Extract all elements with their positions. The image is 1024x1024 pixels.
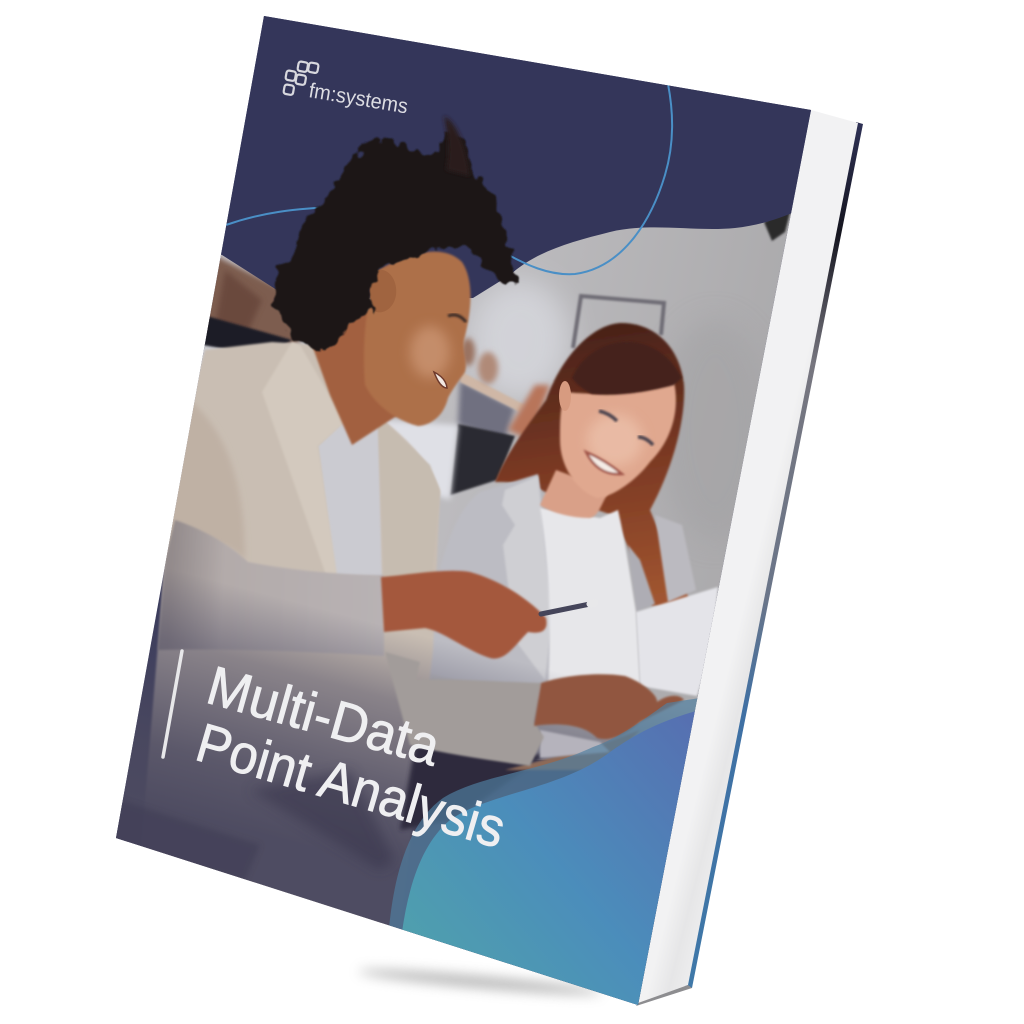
woman with dark hair <box>140 116 595 930</box>
ear <box>369 270 396 312</box>
woman in grey blazer <box>461 321 696 684</box>
title accent bar <box>163 651 182 757</box>
ground shadow <box>358 965 602 999</box>
lower sleeve and second hand <box>385 652 684 830</box>
hair fringe <box>572 342 682 395</box>
dark object top right <box>763 214 791 242</box>
white cuff <box>540 730 610 758</box>
picture frame on wall <box>573 296 664 348</box>
shirt <box>318 424 382 576</box>
face <box>560 382 676 498</box>
lapels <box>262 342 345 575</box>
sleeve <box>385 652 544 766</box>
icon: logo squares <box>283 61 319 95</box>
bottom dark fade <box>116 582 683 1005</box>
neck <box>540 470 610 518</box>
logo: fm:systems <box>283 61 410 118</box>
dark gap under the sleeve <box>400 745 545 830</box>
dark streaks on lower jacket <box>258 768 391 866</box>
blue wave solid <box>400 710 700 1024</box>
page block <box>636 110 858 1006</box>
mouth <box>434 372 447 388</box>
navy wave top <box>221 16 811 298</box>
pen <box>541 603 595 614</box>
hair top tuft <box>444 116 470 176</box>
thin blue curve <box>226 84 672 274</box>
title line 2: Point Analysis <box>190 711 512 860</box>
brown furniture left <box>200 250 300 345</box>
smile <box>586 452 622 474</box>
logo wordmark: fm:systems <box>307 79 410 118</box>
back board of the book <box>684 122 863 988</box>
title <box>190 654 512 860</box>
book mockup illustration <box>116 16 863 1006</box>
title line 1: Multi-Data <box>201 654 447 778</box>
ear <box>559 381 571 411</box>
eye <box>448 315 466 322</box>
eyes <box>599 411 617 421</box>
blurred background colleagues <box>458 380 515 440</box>
office chair behind <box>450 424 515 495</box>
hand <box>534 674 684 739</box>
neck <box>312 305 398 445</box>
photo background: office wall <box>194 193 795 760</box>
pants tone <box>505 730 640 770</box>
hair <box>273 132 516 352</box>
left arm shading <box>170 404 244 555</box>
black chair back left <box>204 316 292 349</box>
face <box>364 252 470 426</box>
front cover <box>100 0 830 1024</box>
white top <box>540 508 640 690</box>
hand with pen <box>381 571 547 659</box>
paper document <box>636 587 718 696</box>
cover base <box>100 0 830 1024</box>
bottom dark band <box>100 800 260 880</box>
jacket body <box>140 342 440 930</box>
grey blazer <box>461 472 549 682</box>
long auburn hair <box>495 323 692 606</box>
blue wave translucent band <box>388 698 700 1020</box>
upper arm sleeve <box>158 520 384 656</box>
